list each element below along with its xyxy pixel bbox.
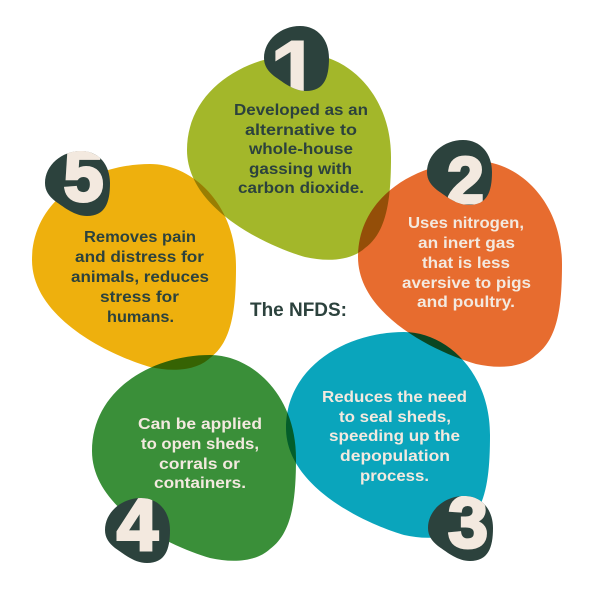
text: panel 2: Uses nitrogen,	[408, 215, 524, 232]
text: panel 1: carbon dioxide.	[238, 180, 364, 197]
text: panel 2: aversive to pigs	[402, 275, 531, 292]
text: panel 3: depopulation	[340, 448, 450, 465]
panel 2: nitrogen	[358, 140, 562, 367]
text: panel 5: animals, reduces	[71, 269, 209, 286]
panel 4: open sheds	[92, 355, 296, 566]
text: panel 5: stress for	[100, 289, 179, 306]
text: panel 4: containers.	[154, 475, 246, 492]
text: panel 3: speeding up the	[329, 428, 460, 445]
text: panel 1: alternative to	[245, 122, 357, 139]
text: panel 1: gassing with	[249, 161, 352, 178]
badge: number 3	[428, 496, 493, 561]
panel 3: seal sheds	[286, 332, 493, 563]
text: panel 5: Removes pain	[84, 229, 196, 246]
text: panel 1: whole-house	[248, 141, 353, 158]
text: panel 5	[71, 229, 209, 326]
badge: number 1	[264, 26, 329, 91]
badge: number 2	[427, 140, 492, 205]
text: panel 3	[322, 389, 467, 485]
badge: number 5: 5	[63, 137, 104, 217]
text: panel 3: to seal sheds,	[339, 409, 451, 426]
text: panel 2: that is less	[422, 255, 510, 272]
blob: orange	[358, 161, 562, 367]
text: panel 4	[138, 416, 262, 492]
badge: number 1: 1	[269, 22, 321, 124]
text: panel 1	[234, 102, 368, 197]
panel 1: alternative to gassing	[187, 22, 391, 260]
badge: number 3: 3	[448, 483, 488, 563]
badge: number 4	[105, 498, 170, 563]
text: panel 1: Developed as an	[234, 102, 368, 119]
text: panel 2	[402, 215, 531, 311]
text: panel 2: an inert gas	[418, 235, 515, 252]
panel 5: removes pain	[32, 137, 236, 370]
text: panel 4: Can be applied	[138, 416, 262, 433]
text: panel 2: and poultry.	[417, 294, 515, 311]
badge: number 5	[45, 151, 110, 216]
title: The NFDS: The NFDS:	[250, 300, 347, 321]
text: panel 4: corrals or	[159, 456, 240, 473]
blob: lime	[187, 54, 391, 260]
text: panel 5: and distress for	[75, 249, 204, 266]
text: panel 4: to open sheds,	[141, 436, 259, 453]
blob: yellow	[32, 164, 236, 370]
blob: teal	[286, 332, 490, 538]
text: panel 3: Reduces the need	[322, 389, 467, 406]
badge: number 4: 4	[117, 483, 158, 566]
badge: number 2: 2	[447, 143, 484, 217]
text: panel 3: process.	[360, 468, 429, 485]
text: panel 5: humans.	[107, 309, 174, 326]
blob: green	[92, 355, 296, 561]
